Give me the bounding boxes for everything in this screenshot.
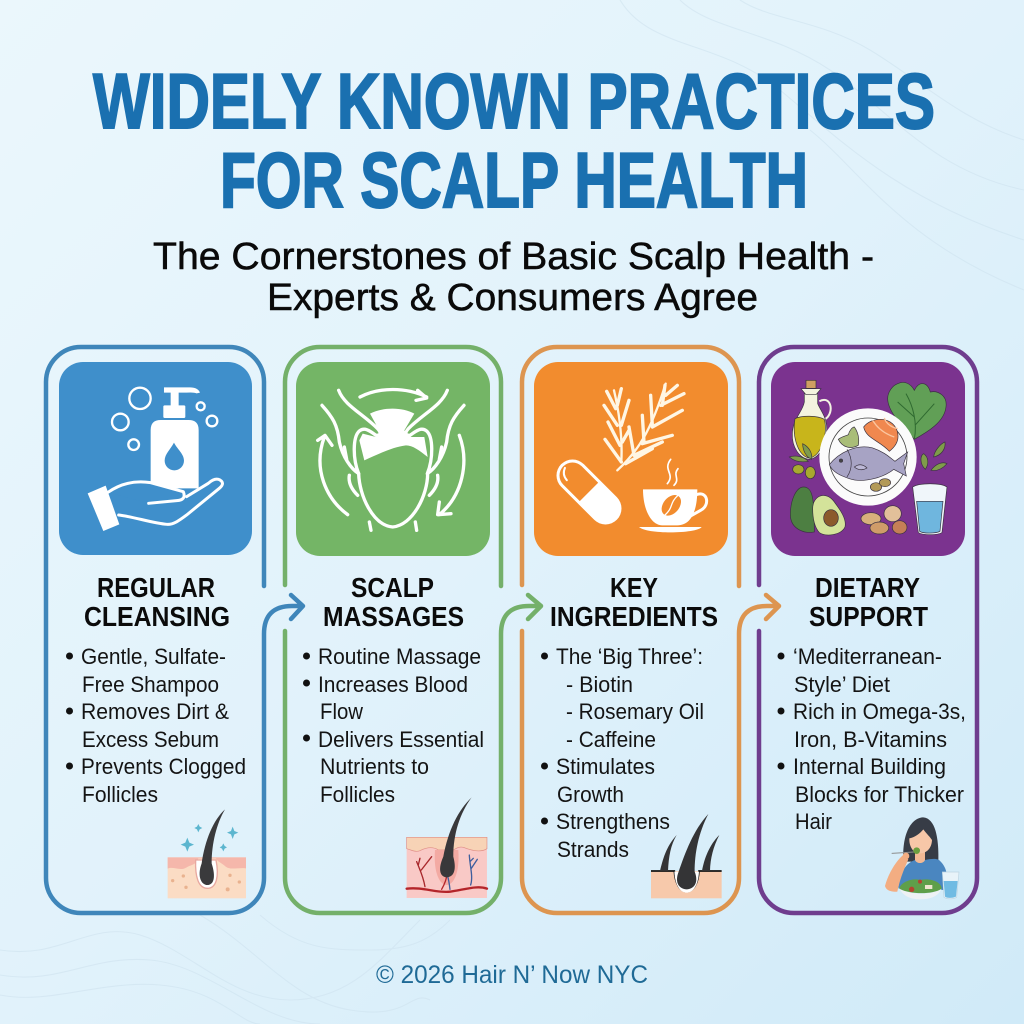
bullet list: ‘Mediterranean- [793,644,942,669]
bullet list: Follicles [320,782,395,807]
heading: REGULAR [97,572,215,603]
bullet list: - Caffeine [566,727,656,752]
title [93,57,935,224]
panel border with connector arrow [522,347,779,913]
bullet list: Strengthens [556,809,670,834]
plate [819,408,917,506]
bullet list [541,644,704,862]
heading: SCALP [351,572,434,603]
panel: regular cleansing [46,347,303,913]
bullet list: The ‘Big Three’: [556,644,703,669]
footer: © 2026 Hair N’ Now NYC [376,961,648,989]
icon: head massage [296,362,490,556]
heading: SUPPORT [809,601,928,632]
bullet list: Hair [795,809,832,834]
almonds [870,483,882,491]
lime [838,427,859,447]
icon: mediterranean food [771,362,965,556]
bullet list: Flow [320,699,364,724]
nuts [861,513,881,525]
water glass [913,484,947,535]
heading [323,572,464,632]
bottle handle [819,400,831,421]
panel: dietary support [759,347,977,913]
heading: KEY [610,572,658,603]
bullet list: Excess Sebum [82,727,219,752]
subtitle: The Cornerstones of Basic Scalp Health - [153,236,874,278]
bullet list: Follicles [82,782,158,807]
bullet list [66,644,246,807]
heading [84,572,230,632]
heading: CLEANSING [84,601,230,632]
icon: hair follicles [651,814,722,898]
bullet list: Gentle, Sulfate- [81,644,226,669]
icon: capsule rosemary coffee [534,362,728,556]
bullet list: Rich in Omega-3s, [793,699,966,724]
panel: scalp massages [285,347,541,913]
icon: follicle with blood vessels [407,797,487,898]
avocado [790,487,814,532]
title: FOR SCALP HEALTH [220,136,808,224]
bullet list: Growth [557,782,624,807]
bullet list: - Rosemary Oil [566,699,704,724]
heading: INGREDIENTS [550,601,718,632]
bullet list: Iron, B-Vitamins [794,727,947,752]
icon: woman eating salad [885,817,959,899]
subtitle: Experts & Consumers Agree [267,277,758,319]
bullet list: Style’ Diet [794,672,891,697]
panel border with connector arrow [285,347,541,913]
bullet list: Blocks for Thicker [795,782,964,807]
icon: clean follicle with sparkles [168,809,246,898]
icon: shampoo bottle in hand [59,362,252,555]
subtitle [153,236,874,319]
bullet list: Strands [557,837,629,862]
bullet list: Routine Massage [318,644,481,669]
bullet list: Removes Dirt & [81,699,229,724]
panel border [759,347,977,913]
fish [829,447,908,480]
bullet list: - Biotin [566,672,633,697]
bullet list [303,644,484,807]
lettuce [888,382,946,439]
panel border with connector arrow [46,347,303,913]
bullet list: Prevents Clogged [81,754,246,779]
heading: DIETARY [815,572,920,603]
bullet list: Increases Blood [318,672,468,697]
bullet list: Internal Building [793,754,946,779]
panel: key ingredients [522,347,779,913]
heading [809,572,928,632]
bullet list: Nutrients to [320,754,429,779]
small leaves [921,442,947,471]
bullet list: Delivers Essential [318,727,484,752]
bullet list: Free Shampoo [82,672,219,697]
heading: MASSAGES [323,601,464,632]
oil bottle [792,394,827,459]
bullet list: Stimulates [556,754,655,779]
bullet list [778,644,966,834]
heading [550,572,718,632]
salmon [864,419,898,451]
